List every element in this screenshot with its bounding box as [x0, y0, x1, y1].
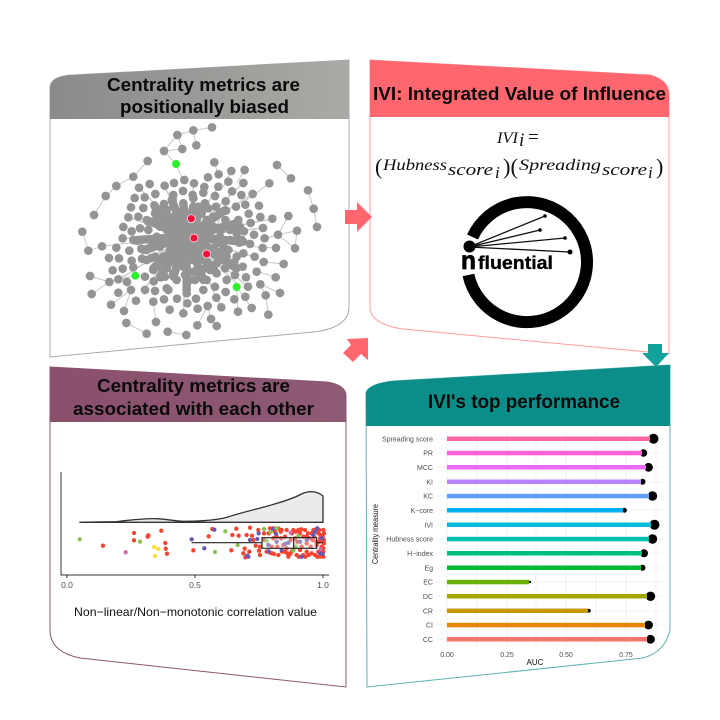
panel header: red band	[370, 60, 669, 117]
arrow: down	[642, 344, 669, 367]
logo: influential	[461, 202, 587, 322]
heading: IVI: IVI: Integrated Value of Influence	[373, 83, 666, 104]
category labels: Hubness score	[386, 536, 433, 544]
lollipop chart	[371, 430, 665, 667]
panel header: grey band	[50, 55, 350, 119]
formula: (	[375, 154, 382, 179]
formula: score	[602, 160, 648, 179]
formula: score	[448, 160, 494, 179]
heading: metrics associated	[73, 375, 314, 419]
category labels: K−core	[411, 508, 433, 515]
panel: positional bias	[50, 55, 350, 357]
category labels: IVI	[424, 522, 433, 530]
category labels: EC	[423, 580, 433, 586]
axis tick labels: 0.5	[189, 580, 201, 590]
highlighted nodes: green	[131, 160, 241, 291]
category labels: KC	[423, 494, 433, 500]
category labels: PR	[423, 450, 433, 458]
box plot	[192, 538, 323, 548]
category labels: CR	[423, 608, 433, 616]
dots	[529, 434, 660, 644]
category labels: Eg	[424, 566, 433, 572]
heading: centrality metrics positionally biased: Centrality metrics are	[107, 74, 300, 95]
panel: associations	[45, 360, 350, 687]
x axis title: Non−linear/Non−monotonic correlation value	[74, 605, 317, 619]
value axis ticks: 0.25	[500, 652, 514, 659]
category labels	[382, 436, 433, 644]
heading: metrics associated: Centrality metrics are	[97, 375, 290, 396]
logo: influential: fluential	[478, 253, 553, 273]
formula: )(	[503, 154, 518, 179]
highlighted nodes: red	[187, 215, 211, 258]
jitter points	[80, 528, 324, 557]
category labels: KI	[426, 480, 433, 486]
axes	[61, 472, 329, 578]
formula: i	[648, 163, 653, 182]
category labels: H−index	[407, 551, 433, 558]
axis title: AUC: AUC	[527, 658, 544, 667]
heading: metrics associated: associated with each other	[73, 398, 314, 419]
raincloud chart	[61, 472, 329, 619]
formula: Hubness	[382, 157, 447, 174]
formula	[375, 127, 663, 182]
arrow: right	[345, 202, 372, 232]
category labels: Spreading score	[382, 436, 433, 444]
heading: centrality metrics positionally biased: positionally biased	[120, 96, 289, 117]
axis title: centrality measure: Centrality measure	[371, 504, 380, 564]
axis tick labels: 1.0	[317, 580, 329, 590]
panel: IVI performance	[360, 360, 675, 687]
category labels: DC	[423, 594, 433, 601]
formula: IVI	[496, 130, 519, 147]
dense core rays	[137, 200, 243, 290]
value axis ticks: 0.75	[619, 652, 633, 659]
formula: =	[528, 127, 539, 148]
arrow: up-right	[343, 338, 368, 362]
formula: )	[656, 154, 663, 179]
heading: top performance: IVI's top performance	[428, 391, 620, 413]
density curve	[79, 492, 323, 522]
value axis ticks: 0.50	[559, 652, 573, 659]
value axis ticks	[440, 652, 633, 659]
panel header: teal band	[366, 365, 670, 426]
category labels: CC	[423, 637, 433, 644]
category labels: CI	[426, 622, 433, 630]
logo: influential: n	[461, 245, 476, 275]
panel: IVI definition	[365, 55, 675, 354]
axis tick labels	[61, 580, 329, 590]
formula: Spreading	[519, 157, 601, 174]
value axis ticks: 0.00	[440, 652, 454, 659]
panel header: plum band	[50, 368, 346, 422]
category labels: MCC	[417, 465, 433, 472]
axis tick labels: 0.0	[61, 580, 73, 590]
bars	[447, 436, 651, 642]
formula: i	[519, 130, 524, 151]
formula: i	[495, 163, 500, 182]
network graph	[82, 127, 317, 335]
heading: centrality metrics positionally biased	[107, 74, 300, 117]
